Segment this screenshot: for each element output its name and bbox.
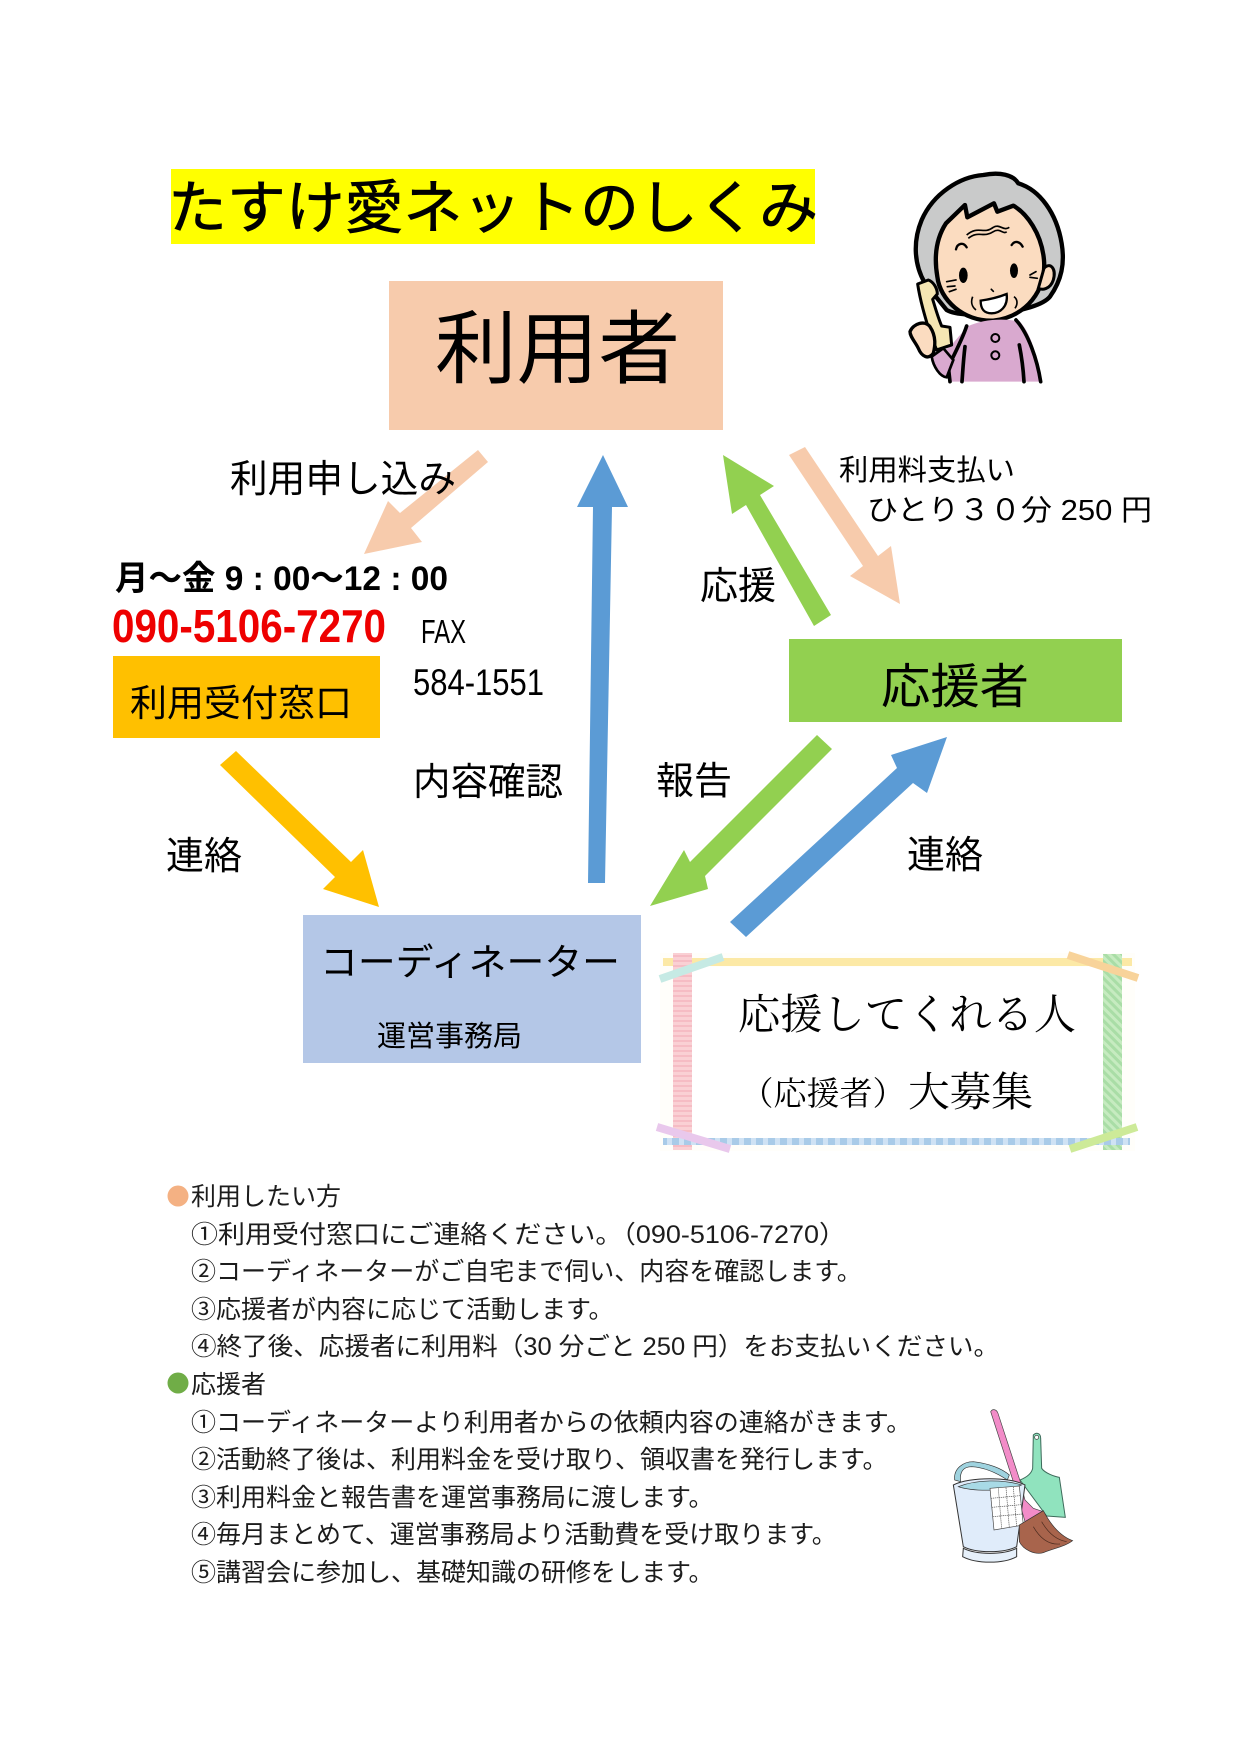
section: for users: ④終了後、応援者に利用料（30 分ごと 250 円）をお支払いください。 bbox=[191, 1333, 999, 1361]
arrow: supporter report bbox=[650, 735, 832, 906]
panel: reception desk bbox=[113, 656, 380, 738]
fax number: 584-1551 bbox=[413, 662, 544, 703]
section: for users: ②コーディネーターがご自宅まで伺い、内容を確認します。 bbox=[191, 1258, 862, 1286]
label: support: 応援 bbox=[700, 566, 776, 608]
section: for users bbox=[168, 1183, 999, 1361]
section: for users: 利用したい方 bbox=[191, 1183, 341, 1211]
opening hours: 月～金 9 : 00～12 : 00 bbox=[115, 560, 448, 598]
label: contact right: 連絡 bbox=[907, 835, 983, 877]
section: for users: ③応援者が内容に応じて活動します。 bbox=[191, 1296, 614, 1324]
section: for supporters: ④毎月まとめて、運営事務局より活動費を受け取ります。 bbox=[191, 1521, 837, 1549]
panel: supporter box: 応援者 bbox=[881, 661, 1029, 714]
panel: coordinator box: 運営事務局 bbox=[377, 1020, 522, 1053]
section: for supporters: ⑤講習会に参加し、基礎知識の研修をします。 bbox=[191, 1559, 714, 1587]
panel: recruitment frame bbox=[657, 953, 1138, 1151]
arrow: confirm contents bbox=[577, 455, 628, 883]
title: たすけ愛ネットのしくみ bbox=[168, 176, 818, 241]
label: confirm contents: 内容確認 bbox=[413, 762, 563, 804]
panel: user box: 利用者 bbox=[435, 305, 680, 394]
panel: supporter box bbox=[789, 639, 1122, 722]
section: for supporters: 応援者 bbox=[191, 1371, 266, 1399]
fax label: FAX bbox=[421, 613, 466, 650]
panel: coordinator box: コーディネーター bbox=[320, 942, 620, 983]
arrow: support bbox=[723, 455, 831, 626]
label: fee amount: ひとり３０分 250 円 bbox=[867, 495, 1152, 527]
section: for supporters: ③利用料金と報告書を運営事務局に渡します。 bbox=[191, 1484, 714, 1512]
label: application: 利用申し込み bbox=[230, 459, 456, 501]
panel: coordinator box bbox=[303, 915, 641, 1063]
label: contact left: 連絡 bbox=[166, 836, 242, 878]
panel: reception desk: 利用受付窓口 bbox=[130, 683, 352, 724]
arrow: coordinator to supporter bbox=[730, 737, 947, 937]
illustration: elderly woman on telephone bbox=[910, 174, 1063, 382]
panel: recruitment frame: 大募集 bbox=[908, 1059, 1033, 1118]
section: for users: ①利用受付窓口にご連絡ください。（090-5106-7270） bbox=[191, 1221, 846, 1249]
panel: recruitment frame: 応援してくれる人 bbox=[738, 982, 1076, 1042]
section: for supporters: ②活動終了後は、利用料金を受け取り、領収書を発行します。 bbox=[191, 1446, 888, 1474]
section: for supporters: ①コーディネーターより利用者からの依頼内容の連絡がきます。 bbox=[191, 1409, 911, 1437]
arrow: reception to coordinator bbox=[220, 751, 379, 907]
phone number: 090-5106-7270 bbox=[112, 600, 386, 652]
label: fee payment: 利用料支払い bbox=[839, 454, 1015, 487]
panel: recruitment frame: （応援者） bbox=[757, 1068, 889, 1115]
arrow: fee payment bbox=[789, 447, 900, 604]
arrow: application bbox=[364, 450, 488, 554]
panel: user box bbox=[389, 281, 723, 430]
illustration: bucket, broom and dustpan bbox=[953, 1410, 1073, 1562]
label: report: 報告 bbox=[656, 761, 732, 803]
section: for supporters bbox=[168, 1371, 911, 1587]
